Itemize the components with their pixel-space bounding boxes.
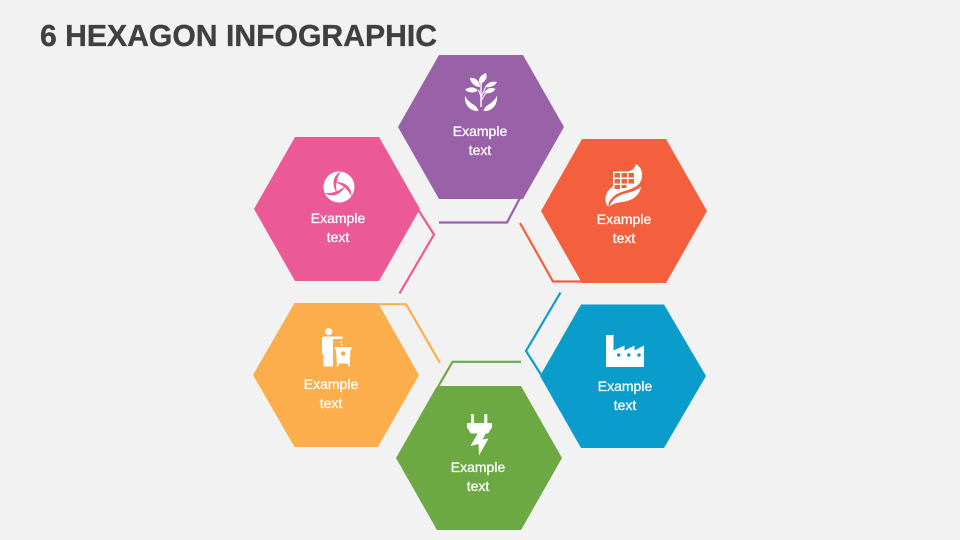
panel: green hexagon [396,362,562,530]
connector: orange [520,223,582,282]
label [598,378,652,413]
label: Example [304,376,358,392]
label [451,459,505,494]
icon: leaf circle [324,172,355,202]
icon: plug with bolt [467,414,492,456]
label: text [327,229,349,245]
label: text [614,397,636,413]
label: Example [453,123,507,139]
label [597,211,651,246]
label: Example [597,211,651,227]
icon: plant in hands [465,73,497,111]
connector: pink [400,211,434,294]
icon: factory [606,335,644,367]
connector: yellow [379,304,440,363]
panel: orange hexagon [520,139,707,283]
connector: purple [439,198,520,222]
label: Example [451,459,505,475]
label: text [467,478,489,494]
label [311,210,365,245]
panel: purple hexagon [398,55,564,222]
connector: blue [526,292,560,374]
panel: pink hexagon [254,137,434,294]
label: text [320,395,342,411]
label: text [469,142,491,158]
panel: yellow hexagon [253,303,440,447]
title: 6 HEXAGON INFOGRAPHIC [40,18,437,53]
panel: blue hexagon [526,292,706,448]
label [304,376,358,411]
connector: green [438,362,521,386]
label: text [613,230,635,246]
label: Example [598,378,652,394]
label [453,123,507,158]
icon: flame with grid [605,164,642,207]
icon: person at bin [322,328,352,366]
label: Example [311,210,365,226]
